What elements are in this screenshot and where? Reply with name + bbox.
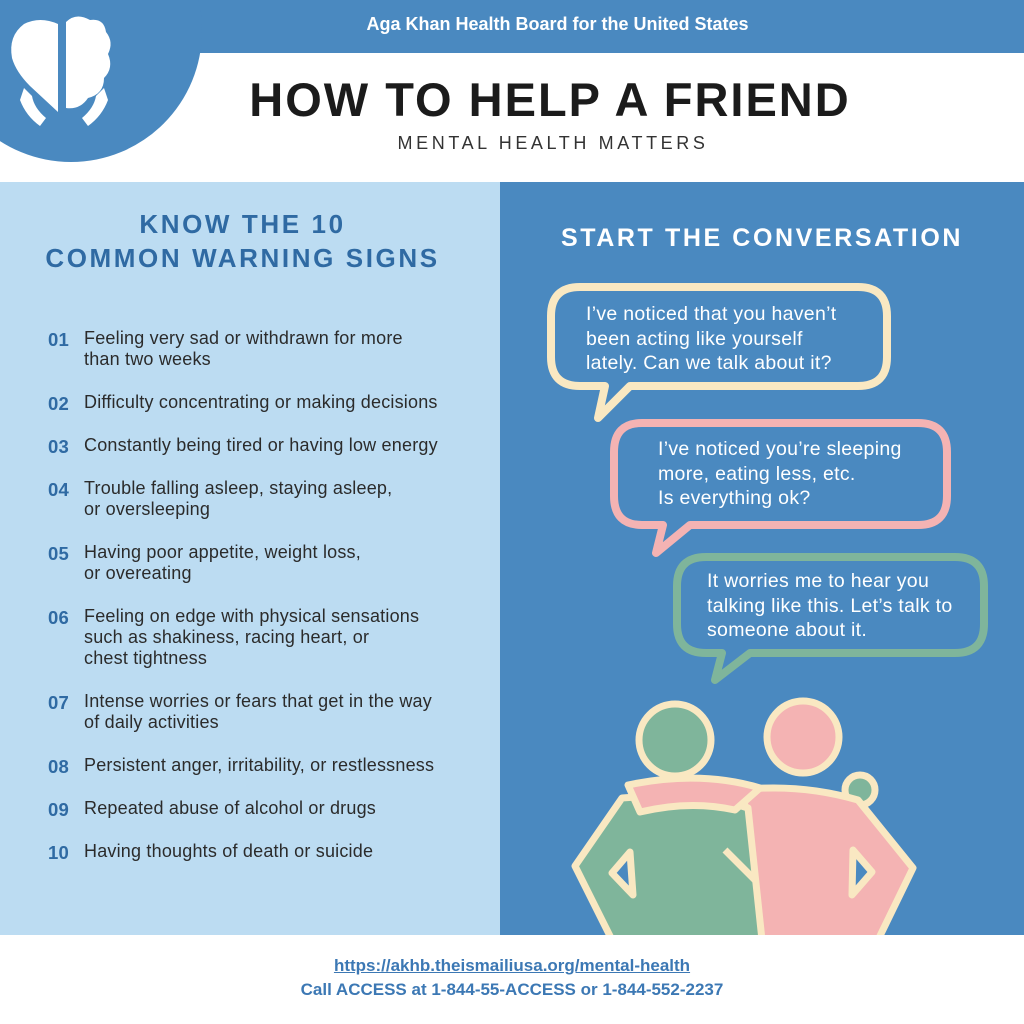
bubble text 1: lately. Can we talk about it? (586, 352, 832, 374)
footer: Call ACCESS at 1-844-55-ACCESS or 1-844-552-2237 (301, 980, 723, 999)
list: warning signs: or overeating (84, 563, 192, 583)
subtitle: MENTAL HEALTH MATTERS (398, 133, 708, 153)
footer: https://akhb.theismailiusa.org/mental-health (334, 956, 690, 975)
bubble 3 (677, 557, 984, 680)
list: warning signs: 02 (48, 393, 69, 414)
bubble text 2: Is everything ok? (658, 487, 811, 509)
list: warning signs: Persistent anger, irritability, or restlessness (84, 755, 434, 775)
banner text: Aga Khan Health Board for the United States (366, 14, 749, 34)
bubble text 1: been acting like yourself (586, 328, 803, 350)
bubble text 2 (658, 438, 902, 509)
list: warning signs: Having poor appetite, weight loss, (84, 542, 361, 562)
bubble text 3: It worries me to hear you (707, 570, 929, 592)
list: warning signs: Constantly being tired or having low energy (84, 435, 438, 455)
heading: warning signs: KNOW THE 10 (139, 209, 346, 239)
list: warning signs: 07 (48, 692, 69, 713)
list: warning signs: than two weeks (84, 349, 211, 369)
bubble 1 (551, 287, 887, 418)
list: warning signs: Trouble falling asleep, staying asleep, (84, 478, 392, 498)
bubble text 1: I’ve noticed that you haven’t (586, 303, 836, 325)
bubble text 1 (586, 303, 836, 374)
heading: conversation: START THE CONVERSATION (561, 224, 963, 252)
heading: warning signs (45, 209, 440, 273)
list: warning signs: 08 (48, 756, 69, 777)
top banner (0, 0, 1024, 53)
list: warning signs (48, 328, 438, 863)
list: warning signs: 10 (48, 842, 69, 863)
people illustration (575, 701, 913, 940)
list: warning signs: 04 (48, 479, 69, 500)
list: warning signs: Difficulty concentrating or making decisions (84, 392, 438, 412)
heading: warning signs: COMMON WARNING SIGNS (45, 243, 440, 273)
list: warning signs: Intense worries or fears that get in the way (84, 691, 432, 711)
list: warning signs: 05 (48, 543, 69, 564)
list: warning signs: 01 (48, 329, 69, 350)
footer (301, 956, 723, 999)
list: warning signs: Feeling very sad or withdrawn for more (84, 328, 403, 348)
bubble text 2: I’ve noticed you’re sleeping (658, 438, 902, 460)
title: HOW TO HELP A FRIEND (249, 73, 851, 126)
panel: start the conversation (500, 182, 1024, 935)
list: warning signs: 09 (48, 799, 69, 820)
bubble 2 (614, 423, 947, 553)
list: warning signs: 03 (48, 436, 69, 457)
bubble text 3: talking like this. Let’s talk to (707, 594, 953, 616)
bubbles (547, 283, 988, 935)
list: warning signs: such as shakiness, racing heart, or (84, 627, 369, 647)
bubble text 2: more, eating less, etc. (658, 462, 856, 484)
list: warning signs: Having thoughts of death or suicide (84, 841, 373, 861)
list: warning signs: Repeated abuse of alcohol or drugs (84, 798, 376, 818)
panel: warning signs (0, 182, 500, 935)
list: warning signs: chest tightness (84, 648, 207, 668)
list: warning signs: 06 (48, 607, 69, 628)
list: warning signs: Feeling on edge with physical sensations (84, 606, 419, 626)
bubble text 3 (707, 570, 953, 641)
bubble text 3: someone about it. (707, 619, 867, 641)
list: warning signs: or oversleeping (84, 499, 210, 519)
list: warning signs: of daily activities (84, 712, 219, 732)
logo (0, 0, 202, 162)
